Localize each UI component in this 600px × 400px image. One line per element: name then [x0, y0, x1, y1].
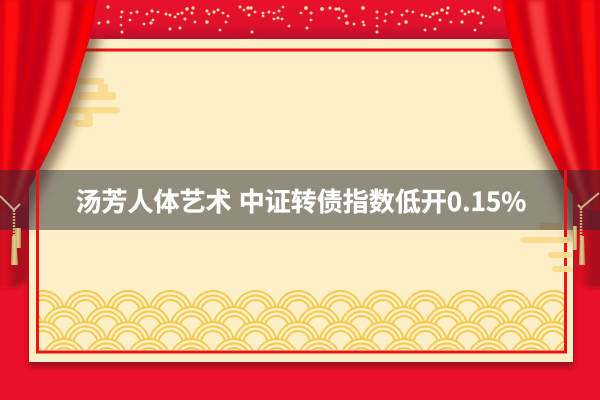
top red band [0, 0, 600, 39]
scallop wave border [39, 290, 564, 350]
left tassel [0, 196, 21, 265]
grey title band [0, 170, 600, 230]
right curtain [502, 0, 600, 212]
right tassel [573, 193, 599, 265]
title text: 汤芳人体艺术 中证转债指数低开0.15% [76, 182, 526, 219]
cloud motif right [520, 223, 572, 272]
left curtain [0, 0, 97, 212]
cream panel [29, 39, 573, 362]
curtain shadows on panel [0, 0, 600, 244]
cloud motif left [68, 78, 120, 127]
lower left curtain [0, 205, 32, 288]
lower right curtain [570, 205, 600, 288]
panel shadow [29, 52, 573, 367]
red border segments over band [36, 170, 567, 230]
confetti dots [98, 5, 500, 34]
